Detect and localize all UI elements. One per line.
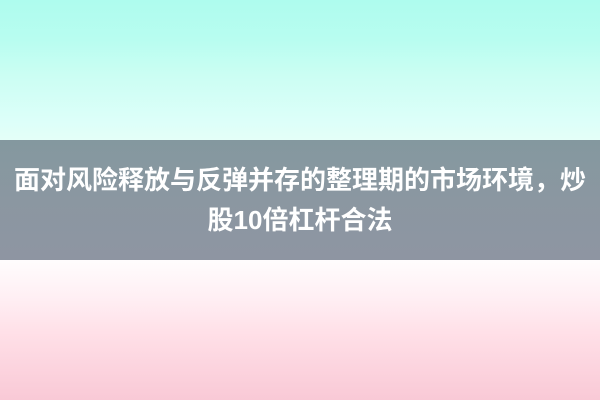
title [14,165,586,235]
title band [0,140,600,260]
title: 面对风险释放与反弹并存的整理期的市场环境，炒 [14,165,586,195]
title: 股10倍杠杆合法 [208,205,392,235]
